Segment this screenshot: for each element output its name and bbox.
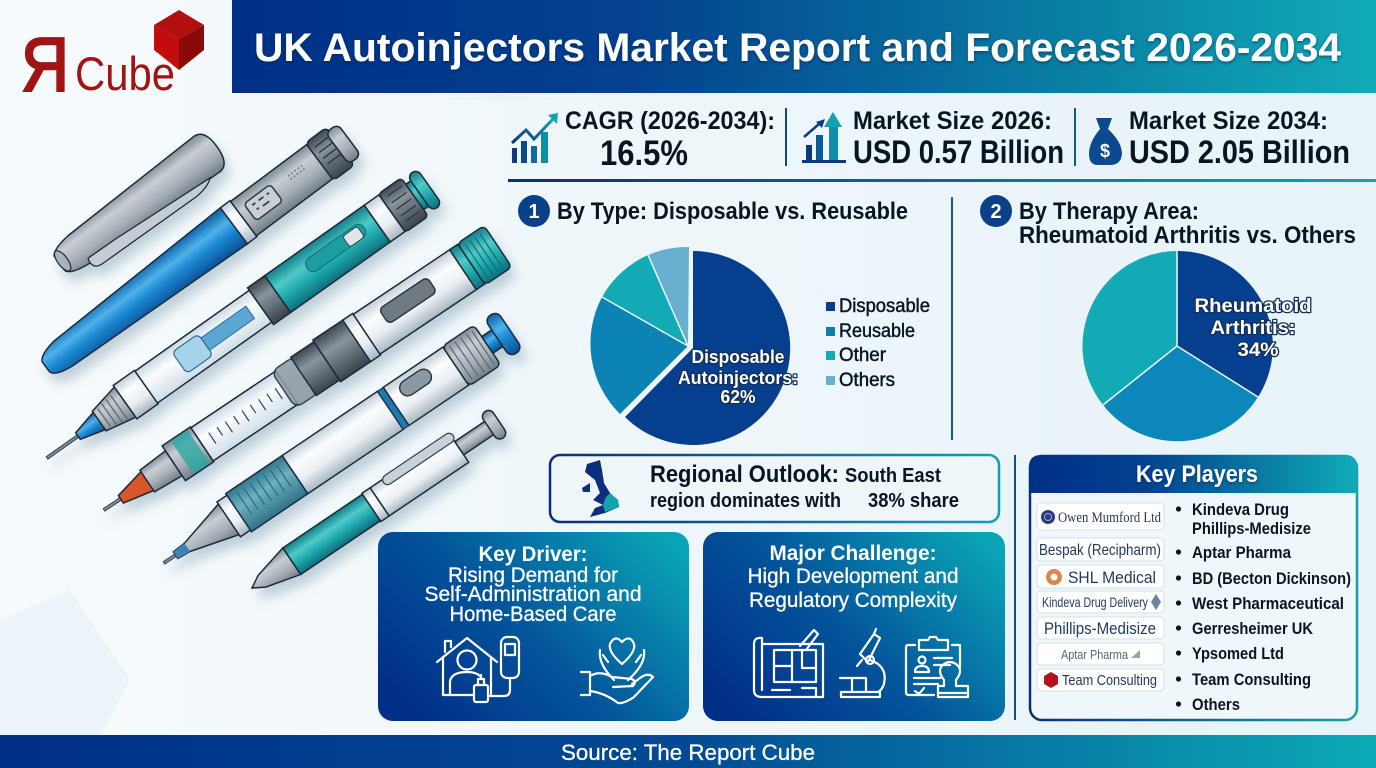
pie chart: type — [590, 247, 798, 445]
number badge 1 — [518, 195, 550, 227]
label: CAGR (2026-2034): — [565, 107, 775, 135]
logo mark letter: Я — [21, 23, 69, 108]
logo: Owen Mumford: Owen Mumford Ltd — [1058, 510, 1162, 526]
logo: Owen Mumford — [1037, 503, 1164, 530]
label: Market Size 2026: — [853, 107, 1052, 135]
legend: Others — [839, 370, 895, 391]
value: USD 2.05 Billion — [1129, 134, 1350, 170]
title: UK Autoinjectors Market Report and Forecast 2026-2034 — [254, 26, 1342, 70]
stat: market size 2034 — [1089, 107, 1350, 170]
stat: CAGR — [512, 107, 775, 173]
pie label: Disposable — [692, 346, 784, 367]
player list — [1176, 500, 1351, 714]
regional text: region dominates with — [650, 489, 841, 512]
icon: red cube — [154, 10, 204, 70]
pen 3: white body with red tip — [90, 226, 512, 531]
icon: money bag: $ — [1100, 141, 1110, 161]
header — [1029, 455, 1357, 493]
player list: West Pharmaceutical — [1192, 594, 1344, 613]
pie label — [1194, 295, 1312, 361]
logo: Bespak — [1037, 538, 1164, 561]
panel: regional outlook — [550, 455, 999, 522]
logo: Phillips-Medisize: Phillips-Medisize — [1044, 619, 1156, 638]
number badge 2 — [980, 195, 1012, 227]
pie chart: therapy area — [1082, 251, 1312, 441]
heading: By Type: Disposable vs. Reusable — [557, 198, 908, 225]
icon: bars and arrow — [802, 112, 846, 163]
logo: Aptar Pharma — [1037, 643, 1164, 665]
stat: market size 2026 — [802, 107, 1064, 170]
number badge 1: 1 — [528, 201, 540, 223]
player list: Ypsomed Ltd — [1192, 644, 1284, 663]
pen 2: clear barrel with teal body — [33, 167, 443, 477]
regional text: South East — [845, 464, 941, 487]
legend: Disposable — [839, 296, 930, 317]
description — [424, 564, 642, 626]
section: by type — [518, 195, 930, 445]
pie label: Arthritis: — [1210, 317, 1296, 339]
regional text: Regional Outlook: — [650, 461, 839, 488]
pen 4: white body with blue knob — [151, 310, 523, 583]
icon: blueprint — [754, 630, 823, 697]
legend: Other — [839, 345, 887, 366]
source text: Source: The Report Cube — [561, 740, 815, 765]
label: Market Size 2034: — [1129, 107, 1328, 135]
description: Home-Based Care — [450, 603, 616, 626]
number badge 2: 2 — [990, 201, 1002, 223]
pen 1: blue and grey — [32, 121, 363, 385]
panel: major challenge — [703, 532, 1005, 721]
description: Rising Demand for — [448, 564, 618, 587]
value: USD 0.57 Billion — [853, 134, 1064, 170]
value: 16.5% — [600, 134, 688, 173]
pie label: 62% — [720, 386, 756, 407]
panel: key driver — [378, 532, 689, 721]
logo: Kindeva: Kindeva Drug Delivery — [1042, 594, 1148, 610]
icon: money bag — [1089, 118, 1122, 165]
icon: UK map — [582, 460, 619, 517]
pie label: Autoinjectors: — [678, 367, 798, 388]
regional text — [650, 461, 959, 512]
footer — [0, 735, 1376, 768]
legend — [826, 296, 930, 391]
logo word: Cube — [75, 47, 175, 100]
description: High Development and — [748, 565, 958, 588]
heading: Major Challenge: — [770, 541, 936, 565]
legend: Reusable — [839, 321, 915, 342]
heading — [1019, 198, 1356, 249]
icon: microscope — [840, 629, 885, 697]
player list: Aptar Pharma — [1192, 543, 1291, 562]
logo: SHL Medical: SHL Medical — [1068, 568, 1156, 587]
pie label: 34% — [1238, 339, 1278, 361]
heading: Key Driver: — [478, 542, 588, 566]
regional text: 38% share — [868, 489, 959, 512]
logo: Team Consulting — [1037, 669, 1164, 691]
header: Key Players — [1136, 461, 1258, 488]
illustration: autoinjector pens — [32, 121, 523, 602]
logo: Team Consulting: Team Consulting — [1062, 673, 1157, 689]
description: Self-Administration and — [424, 583, 642, 606]
heading: By Therapy Area: — [1019, 198, 1199, 225]
logo: Bespak: Bespak (Recipharm) — [1039, 542, 1161, 559]
pen 5: small teal pen — [241, 406, 509, 602]
section: by therapy area — [980, 195, 1356, 441]
pie label — [678, 346, 798, 407]
player list: Phillips-Medisize — [1192, 519, 1311, 538]
player list: Gerresheimer UK — [1192, 619, 1314, 638]
icon: clipboard and stamp — [906, 637, 968, 697]
logo: SHL Medical — [1037, 565, 1164, 588]
player list: Others — [1192, 695, 1240, 714]
icon: home care — [437, 637, 519, 702]
pen cap — [46, 129, 234, 286]
icon: caring hands with heart — [581, 638, 653, 703]
panel: key players — [1029, 455, 1357, 720]
description — [748, 565, 958, 612]
player list: Team Consulting — [1192, 670, 1311, 689]
logo: RCube — [21, 10, 204, 108]
player list: Kindeva Drug — [1192, 500, 1289, 519]
logo: Kindeva — [1037, 591, 1164, 613]
player list: BD (Becton Dickinson) — [1192, 569, 1351, 588]
icon: rising bar chart — [512, 113, 558, 163]
description: Regulatory Complexity — [749, 589, 957, 612]
title banner — [232, 0, 1376, 93]
pie label: Rheumatoid — [1194, 295, 1312, 317]
logo: Aptar Pharma: Aptar Pharma — [1061, 648, 1128, 662]
